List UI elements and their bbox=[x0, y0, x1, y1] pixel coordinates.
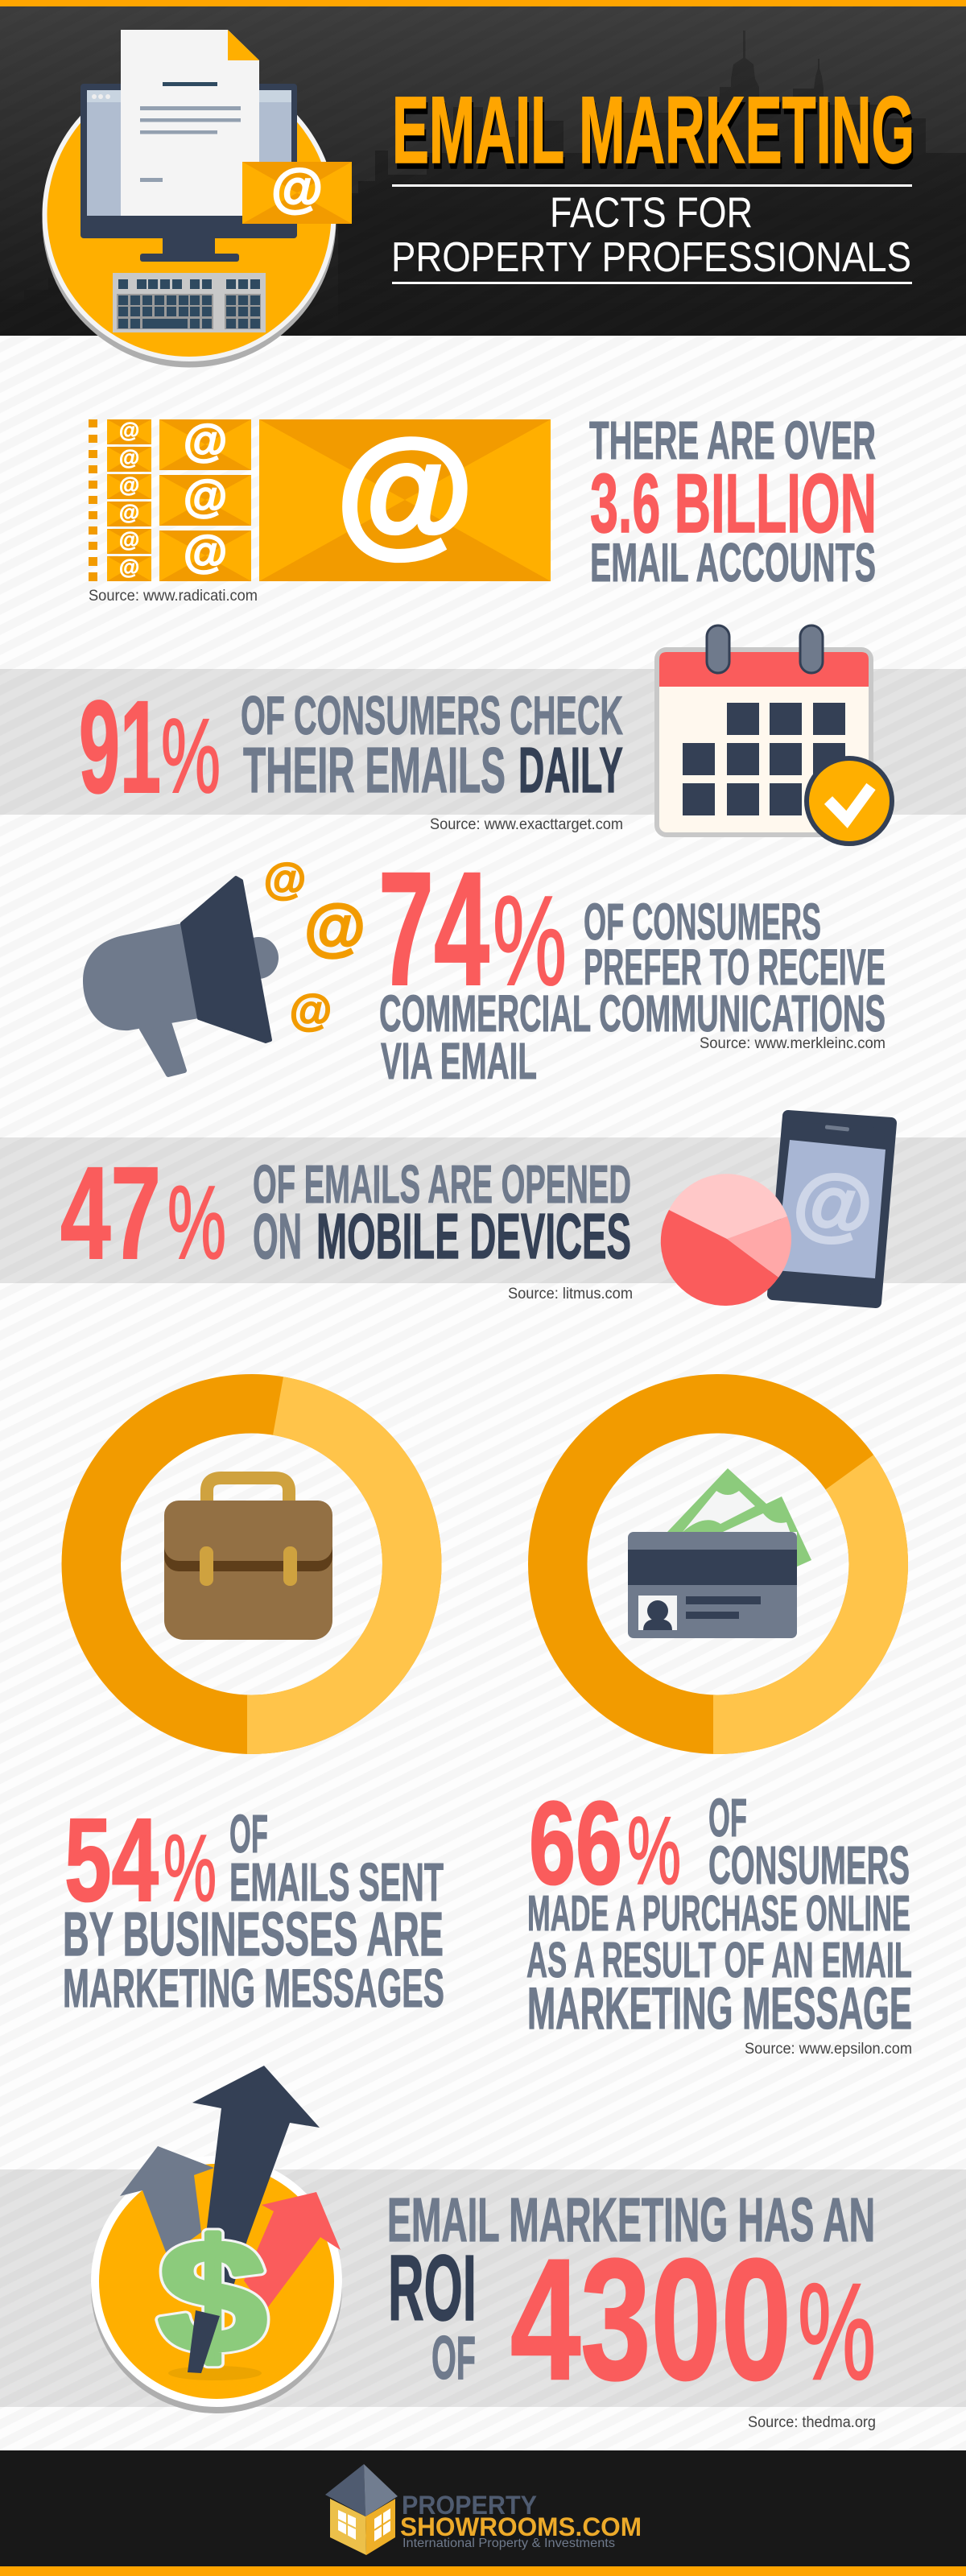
stat: 47 percent on mobile: OF EMAILS ARE OPENED bbox=[253, 1154, 631, 1215]
icon: envelopes row: @ bbox=[336, 412, 473, 569]
header panel bbox=[0, 0, 966, 336]
logo: property showrooms: PROPERTY bbox=[402, 2491, 537, 2520]
band: ROI bbox=[0, 2169, 966, 2407]
icon: envelopes row bbox=[89, 412, 551, 581]
stat: 66 percent purchased online bbox=[526, 1777, 912, 2041]
icon: envelopes row: @ bbox=[184, 470, 227, 521]
stat: 54 percent marketing messages: BY BUSINESSES ARE bbox=[63, 1900, 444, 1969]
stat: 91 percent check daily: DAILY bbox=[518, 734, 623, 806]
donut chart: 66 percent bbox=[558, 1404, 908, 1754]
source: litmus: Source: litmus.com bbox=[508, 1286, 633, 1302]
subtitle: FACTS FOR bbox=[550, 189, 753, 237]
stat: ROI 4300 percent bbox=[387, 2186, 876, 2416]
source: thedma: Source: thedma.org bbox=[748, 2414, 876, 2431]
icon: envelopes row: @ bbox=[119, 500, 139, 524]
stat: 74 percent prefer email: 74 bbox=[378, 838, 489, 1019]
icon: envelopes row: @ bbox=[119, 555, 139, 579]
icon: envelopes row: @ bbox=[184, 415, 227, 465]
stat: 54 percent marketing messages: 54 bbox=[64, 1794, 159, 1926]
source: merkleinc: Source: www.merkleinc.com bbox=[700, 1035, 886, 1052]
source: radicati: Source: www.radicati.com bbox=[89, 588, 258, 605]
stat: 47 percent on mobile: ON bbox=[253, 1200, 302, 1272]
stat: 74 percent prefer email: VIA EMAIL bbox=[381, 1032, 537, 1090]
icon: dollar with growth arrows: $ bbox=[159, 2207, 266, 2385]
icon: megaphone with at signs: @ bbox=[264, 855, 306, 903]
stat: 91 percent check daily: 91 bbox=[79, 673, 161, 820]
stat: 54 percent marketing messages: % bbox=[163, 1815, 217, 1921]
city skyline silhouette bbox=[0, 31, 966, 336]
logo: property showrooms: International Property & Investments bbox=[402, 2537, 615, 2550]
stat: 3.6 billion email accounts bbox=[589, 411, 877, 593]
stat: 74 percent prefer email bbox=[378, 838, 886, 1090]
icon: computer, document and email in circle bbox=[42, 30, 352, 367]
stat: 47 percent on mobile: MOBILE DEVICES bbox=[316, 1200, 631, 1272]
icon: megaphone with at signs: @ bbox=[290, 986, 332, 1034]
icon: envelopes row: @ bbox=[119, 445, 139, 469]
icon: envelopes row: @ bbox=[119, 473, 139, 497]
stat: 66 percent purchased online: % bbox=[627, 1798, 681, 1905]
source: epsilon: Source: www.epsilon.com bbox=[745, 2041, 912, 2058]
stat: 47 percent on mobile bbox=[60, 1139, 631, 1286]
stat: 54 percent marketing messages: EMAILS SENT bbox=[229, 1852, 444, 1913]
stat: 47 percent on mobile: % bbox=[167, 1165, 226, 1281]
stat: 66 percent purchased online: OF bbox=[708, 1788, 747, 1848]
stat: 54 percent marketing messages: OF bbox=[229, 1804, 268, 1864]
stat: ROI 4300 percent: 4300 bbox=[510, 2223, 791, 2416]
stat: 54 percent marketing messages bbox=[63, 1794, 444, 2019]
stat: 66 percent purchased online: 66 bbox=[529, 1777, 622, 1909]
icon: phone with pie chart bbox=[661, 1116, 891, 1306]
stat: 91 percent check daily: OF CONSUMERS CHECK bbox=[241, 685, 623, 746]
icon: computer, document and email in circle: @ bbox=[271, 158, 323, 217]
logo: property showrooms bbox=[325, 2464, 642, 2555]
icon: credit card and banknotes bbox=[628, 1468, 811, 1638]
stat: ROI 4300 percent: OF bbox=[431, 2324, 476, 2392]
donut chart: 54 percent bbox=[91, 1377, 442, 1754]
icon: phone with pie chart: @ bbox=[789, 1154, 877, 1253]
icon: envelopes row: @ bbox=[119, 418, 139, 442]
icon: dollar with growth arrows bbox=[91, 2066, 342, 2413]
stat: 74 percent prefer email: % bbox=[493, 870, 567, 1012]
source: exacttarget: Source: www.exacttarget.com bbox=[430, 816, 623, 833]
stat: ROI 4300 percent: % bbox=[798, 2256, 876, 2409]
icon: megaphone with at signs: @ bbox=[304, 891, 365, 962]
band: 91 percent bbox=[0, 669, 966, 815]
band: 47 percent bbox=[0, 1137, 966, 1283]
icon: briefcase bbox=[164, 1478, 332, 1640]
icon: dollar with growth arrows: $ bbox=[159, 2207, 266, 2385]
footer panel bbox=[0, 2450, 966, 2576]
logo: property showrooms: SHOWROOMS.COM bbox=[400, 2512, 642, 2541]
stat: ROI 4300 percent: ROI bbox=[388, 2235, 477, 2340]
icon: envelopes row: @ bbox=[184, 526, 227, 576]
stat: 47 percent on mobile: 47 bbox=[60, 1139, 161, 1286]
subtitle bbox=[391, 184, 912, 284]
icon: envelopes row: @ bbox=[119, 527, 139, 551]
stat: 91 percent check daily bbox=[79, 673, 623, 820]
stat: 91 percent check daily: % bbox=[161, 696, 221, 815]
stat: 91 percent check daily: THEIR EMAILS bbox=[243, 734, 506, 806]
icon: megaphone with at signs bbox=[83, 855, 365, 1075]
stat: 54 percent marketing messages: MARKETING MESSAGES bbox=[63, 1958, 444, 2019]
icon: calendar with check bbox=[657, 625, 892, 844]
